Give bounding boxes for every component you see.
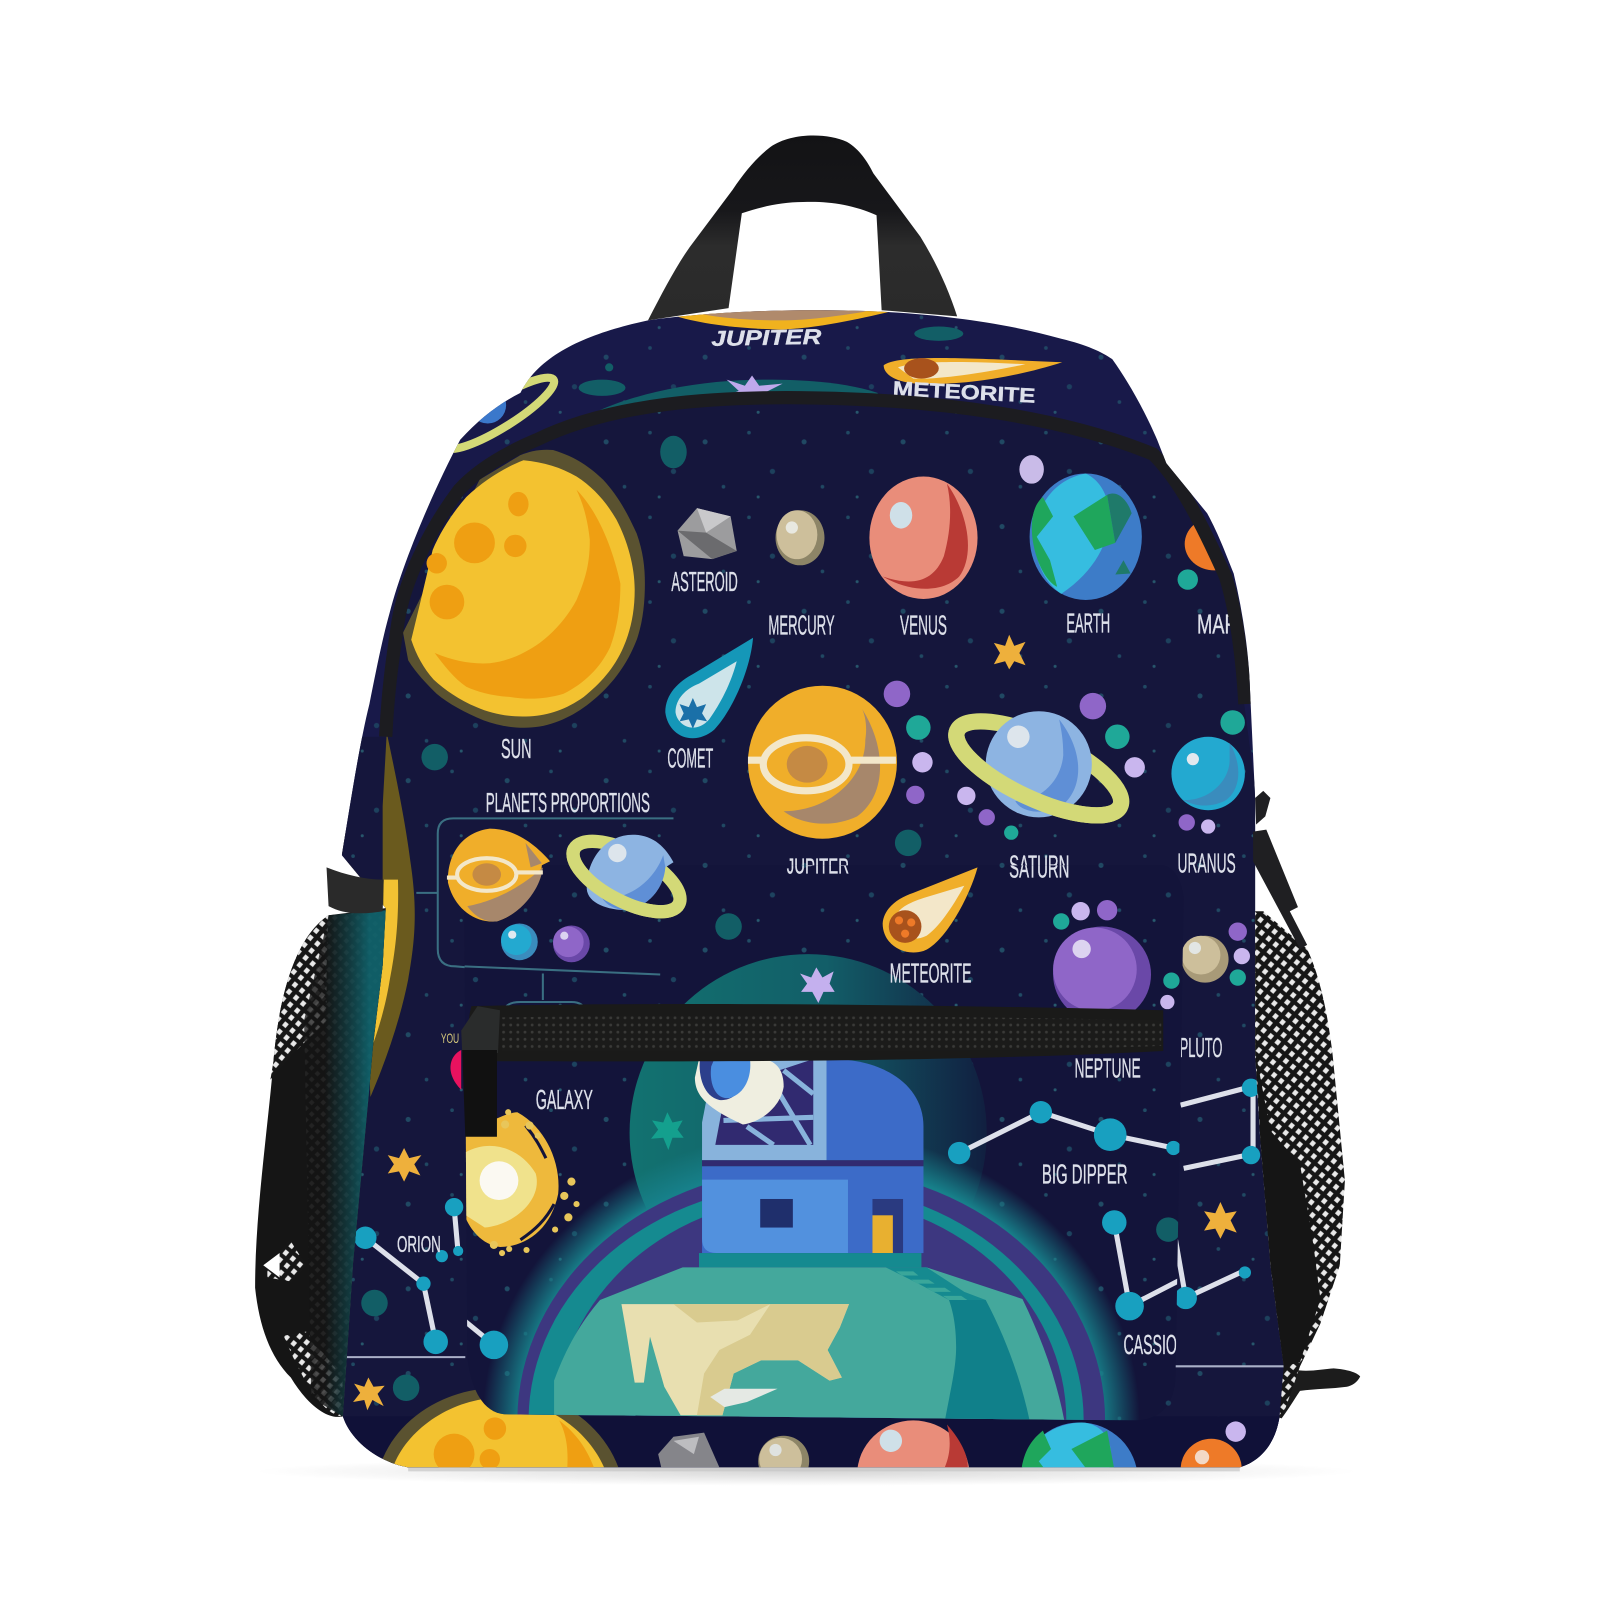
pluto moons [1229,922,1250,986]
mars label: MARS [1197,609,1250,640]
you marker label: YOU [441,1031,459,1047]
pluto [1182,936,1229,983]
teal spot [715,913,742,940]
bottom strip [343,1416,1284,1469]
orange star left [388,1148,421,1182]
ground shade band [945,1300,1030,1420]
planet layers [483,1130,1140,1423]
pocket zipper pull [462,1050,497,1137]
cassiopeia label: CASSIOPEIA [1123,1329,1210,1360]
saturn label: SATURN [1009,849,1069,880]
cassiopeia [1102,1210,1189,1320]
bottom venus [857,1420,969,1529]
side seam stripes [342,833,360,878]
venus [869,477,978,599]
gusset jupiter label: JUPITER [711,325,822,351]
orange star bottom left [353,1378,385,1410]
pocket frame line [463,966,660,1012]
continent shade [673,1304,849,1415]
asteroid [678,508,737,559]
bottom mars [1181,1439,1242,1500]
lavender moon [1019,455,1044,484]
step marks [896,1271,967,1300]
teal dome backdrop [630,954,987,1311]
orion label: ORION [397,1231,441,1257]
proportions jupiter [447,829,550,922]
jupiter moons [884,681,933,804]
platform steps [886,1267,986,1300]
orion constellation [354,1198,463,1354]
teal star [651,1112,684,1150]
saturn [948,711,1130,824]
cloud [710,1389,778,1407]
side sun edge on panel [367,733,415,1097]
uranus [1171,737,1245,810]
mercury [776,510,824,565]
earth [1030,473,1142,600]
pocket zipper [469,1004,1163,1061]
galaxy label: GALAXY [536,1084,593,1115]
pocket jupiter label: JUPITER [787,848,849,879]
ground shadow [255,1457,1357,1486]
front panel: PLANETS PROPORTIONS [486,787,650,818]
bottom asteroid [658,1433,719,1467]
teal moon [1178,569,1198,590]
gusset saturn [453,374,558,453]
pocket saturn label: SATURN [1009,853,1069,884]
right constellation [1181,1079,1260,1168]
neptune label: NEPTUNE [1074,1053,1141,1084]
proportions saturn [563,827,690,926]
galaxy [464,1109,580,1256]
orange star [994,635,1026,669]
teal spot [421,744,448,770]
proportions uranus [501,923,538,960]
main zipper pull [1253,791,1307,949]
proportions frame [416,818,673,967]
front panel: ASTEROID [671,566,738,597]
teal spot [660,436,687,468]
left mesh side pocket [255,908,386,1417]
bottom row sun [380,1388,618,1474]
window [760,1199,793,1228]
front panel: PLUTO [1180,1032,1222,1063]
uranus moons [1179,710,1245,834]
gusset jupiter [677,310,892,330]
purple star [800,967,835,1003]
teal spot [895,830,921,856]
front panel: MERCURY [768,610,835,641]
sun [403,450,645,728]
backpack body [327,296,1296,1537]
orion lower star [465,1321,508,1359]
green ground [554,1267,1064,1420]
orange star right [1204,1202,1237,1239]
neptune [1053,927,1151,1022]
front panel: URANUS [1178,847,1236,878]
front panel [327,393,1286,1537]
neptune moons [1053,900,1180,1009]
meteorite [883,867,978,953]
upper gusset print [327,296,1296,1480]
sun label: SUN [501,733,532,764]
location pin [450,1050,461,1090]
left divider [345,1357,1284,1366]
gusset meteorite label: METEORITE [892,378,1036,408]
teal spot [1156,1217,1181,1242]
gusset teal dome [600,380,878,410]
big dipper [948,1101,1181,1164]
strap tab [1276,1366,1360,1418]
front pocket [459,848,1210,1423]
right mesh side pocket [1255,911,1345,1416]
gusset star [726,376,782,392]
front panel: VENUS [900,610,947,641]
comet [665,638,753,738]
gusset meteorite [884,358,1062,384]
bottom earth [1021,1422,1138,1537]
teal spot [361,1290,388,1316]
gusset dots [579,327,963,396]
door [872,1199,903,1253]
pocket zipper slider [461,1006,500,1053]
front panel: COMET [667,742,713,773]
carry handle [648,135,957,320]
main zipper [386,398,1245,737]
bottom moon [1226,1421,1246,1442]
cassiopeia right part [1174,1240,1251,1309]
front panel: EARTH [1066,608,1110,639]
teal spot [393,1374,419,1401]
meteorite label: METEORITE [890,958,971,989]
proportions neptune [553,926,590,962]
observatory [695,1059,923,1267]
jupiter [748,686,897,839]
bottom shadow strip [408,1467,1240,1471]
side elastic band [327,867,384,913]
saturn moons [957,693,1145,840]
jupiter label: JUPITER [787,853,849,884]
continent [621,1304,849,1415]
mars [1184,525,1216,570]
big dipper label: BIG DIPPER [1042,1159,1128,1190]
bottom mercury [758,1436,809,1487]
telescope mirror [695,1059,784,1124]
